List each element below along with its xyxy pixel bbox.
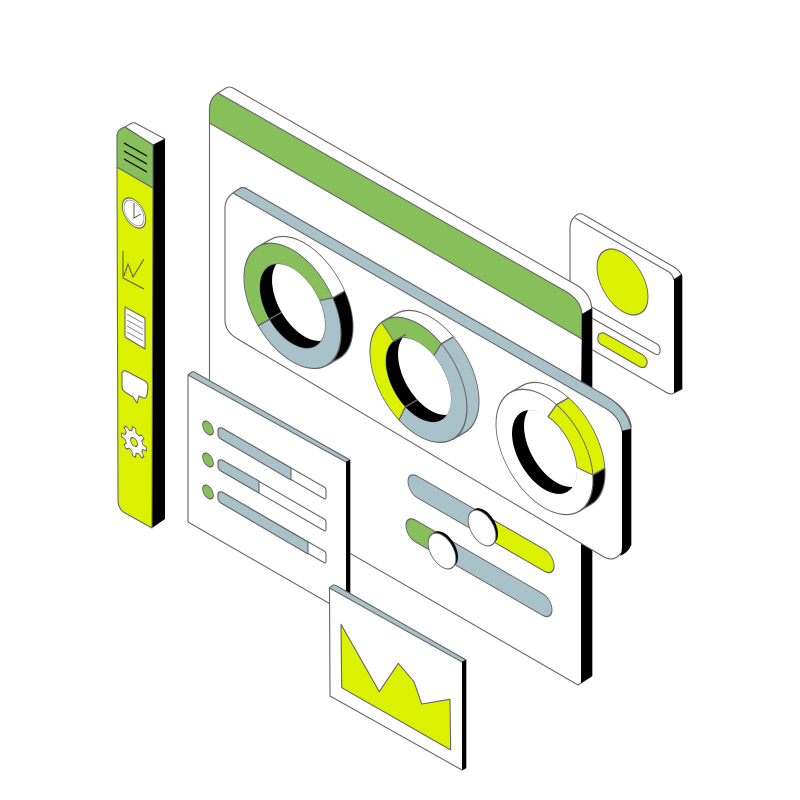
slider 2 bbox=[406, 515, 552, 621]
list row 2 bbox=[203, 451, 326, 531]
slider 1 knob bbox=[468, 501, 498, 553]
slider 1 bbox=[408, 471, 554, 577]
window title bar bbox=[210, 93, 582, 339]
donut chart 2 bbox=[370, 282, 479, 471]
icon: gear bbox=[122, 420, 146, 464]
slider 2 knob bbox=[428, 524, 458, 576]
sidebar lime body bbox=[117, 167, 153, 528]
icon: clock bbox=[122, 193, 146, 233]
panel: sidebar bbox=[117, 123, 165, 528]
panel: donut charts card bbox=[225, 188, 631, 559]
icon: profile avatar circle bbox=[597, 238, 648, 326]
list row 3 bbox=[203, 483, 326, 563]
card top edge bbox=[233, 188, 631, 431]
icon: line chart bbox=[123, 251, 144, 289]
sidebar green header bbox=[117, 127, 153, 188]
donut chart 3 bbox=[496, 354, 605, 543]
window side edge bbox=[581, 308, 592, 683]
profile lime bar bbox=[598, 333, 647, 368]
slider 1 lime portion bbox=[482, 513, 554, 577]
profile name field bbox=[590, 306, 660, 355]
area chart bbox=[341, 624, 451, 750]
donut chart 1 bbox=[244, 208, 353, 397]
panel: list card bbox=[188, 372, 350, 613]
panel: main window bbox=[210, 87, 592, 685]
panel: small profile card bbox=[570, 214, 682, 394]
panel: area chart card bbox=[330, 585, 466, 770]
chart card top edge bbox=[330, 585, 466, 662]
chart card side edge bbox=[462, 660, 466, 770]
icon: speech bubble bbox=[122, 371, 148, 403]
sidebar top face bbox=[125, 123, 165, 145]
icon: menu lines bbox=[124, 143, 147, 172]
list card side edge bbox=[346, 460, 350, 613]
sidebar side face bbox=[152, 139, 165, 528]
list row 1 bbox=[203, 419, 326, 499]
card side edge bbox=[620, 429, 631, 556]
list card top edge bbox=[188, 372, 350, 462]
slider 2 green portion bbox=[406, 515, 442, 557]
icon: document bbox=[125, 307, 145, 349]
